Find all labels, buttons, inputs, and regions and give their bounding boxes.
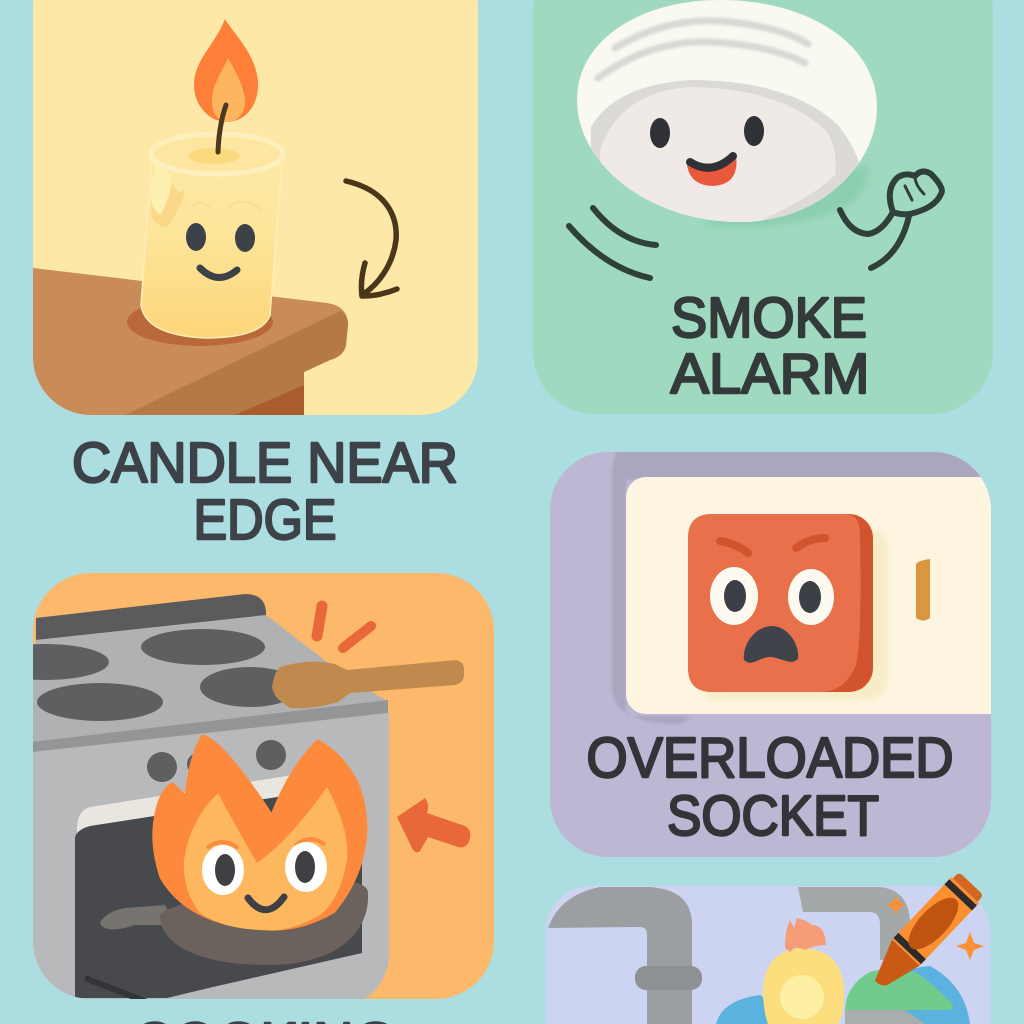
stove [0,594,389,1002]
panel: crayon near pipes [546,886,990,1024]
candle flame [194,19,258,152]
sparkle large [956,932,984,960]
socket plate [626,477,1024,714]
sparks [317,606,371,648]
crayon [863,871,985,996]
label: overloaded socket: OVERLOADED [586,726,954,790]
label: candle near edge: CANDLE NEAR [72,431,458,495]
arrow: falling direction [346,181,397,296]
label: candle near edge: EDGE [194,488,336,552]
alarm face [650,116,764,186]
label: smoke alarm: SMOKE [671,286,867,350]
label: candle near edge [72,431,458,552]
frying pan [100,880,368,965]
right pipe [798,887,910,960]
globe shape [716,966,970,1024]
table [33,268,348,415]
panel: overloaded socket [550,440,1024,857]
left pipe [548,887,702,1024]
alarm body [577,0,880,240]
alarm shadow [700,165,868,227]
motion lines [569,208,656,278]
flame character [155,737,365,930]
sparkle small [886,895,906,915]
label: smoke alarm [670,286,870,406]
label: overloaded socket [588,736,952,837]
arrow: toward stove [397,798,470,852]
candle face [186,223,255,278]
socket face [688,514,887,700]
socket slot [916,559,930,620]
panel: candle near edge [33,0,478,415]
candle body [141,134,283,338]
small candle [763,918,844,1024]
wooden spoon [272,660,464,708]
panel: smoke alarm [533,0,993,414]
panel: cooking [0,573,494,1002]
label: overloaded socket: SOCKET [667,784,879,848]
label: smoke alarm: ALARM [670,342,870,406]
waving hand [840,171,942,268]
